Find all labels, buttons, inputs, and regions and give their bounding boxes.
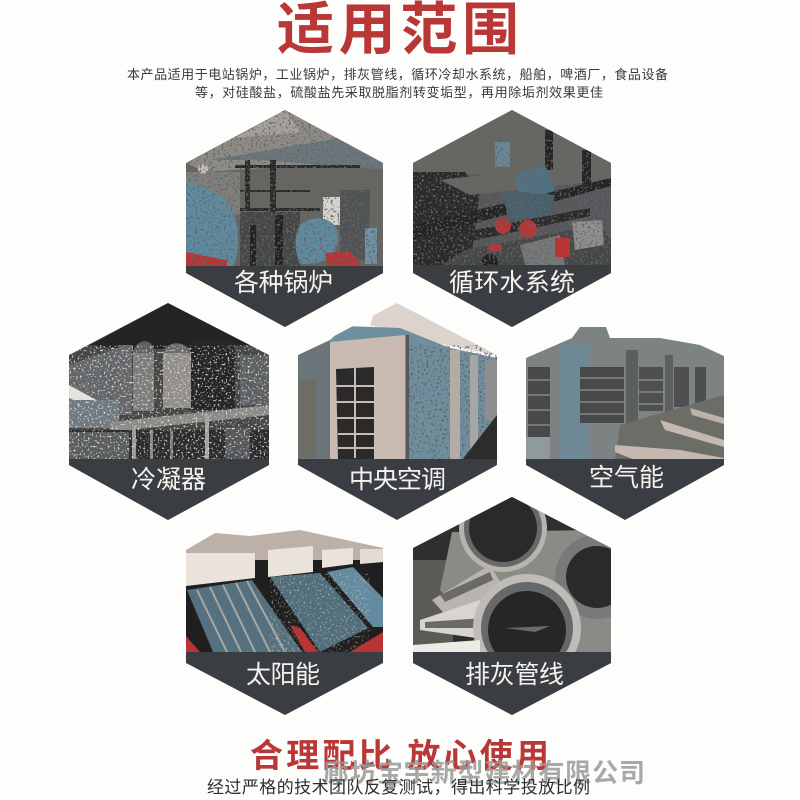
label: circulating water system: 循环水系统: [449, 269, 575, 297]
watermark: 廊坊宝宇新型建材有限公司: [323, 758, 645, 788]
label: central air conditioning: 中央空调: [349, 466, 446, 494]
label: condenser: 冷凝器: [131, 466, 206, 494]
panel: circulating water system: [413, 110, 611, 328]
panel: condenser: [69, 303, 269, 521]
label: solar energy: 太阳能: [246, 661, 320, 689]
panel: boilers: [186, 110, 385, 328]
panel: air energy: [526, 327, 724, 520]
label: air energy: 空气能: [589, 464, 664, 492]
intro text: 等，对硅酸盐，硫酸盐先采取脱脂剂转变垢型，再用除垢剂效果更佳: [195, 85, 603, 100]
intro text: [127, 67, 668, 100]
bottom heading: 合理配比 放心使用: [250, 737, 549, 774]
bottom caption: 经过严格的技术团队反复测试，得出科学投放比例: [207, 778, 590, 797]
panel: central air conditioning: [298, 303, 498, 521]
label: boilers: 各种锅炉: [234, 269, 333, 297]
panel: ash discharge pipeline: [413, 497, 611, 715]
panel: solar energy: [186, 530, 383, 715]
intro text: 本产品适用于电站锅炉，工业锅炉，排灰管线，循环冷却水系统，船舶，啤酒厂，食品设备: [127, 67, 668, 82]
label: ash discharge pipeline: 排灰管线: [465, 661, 564, 689]
